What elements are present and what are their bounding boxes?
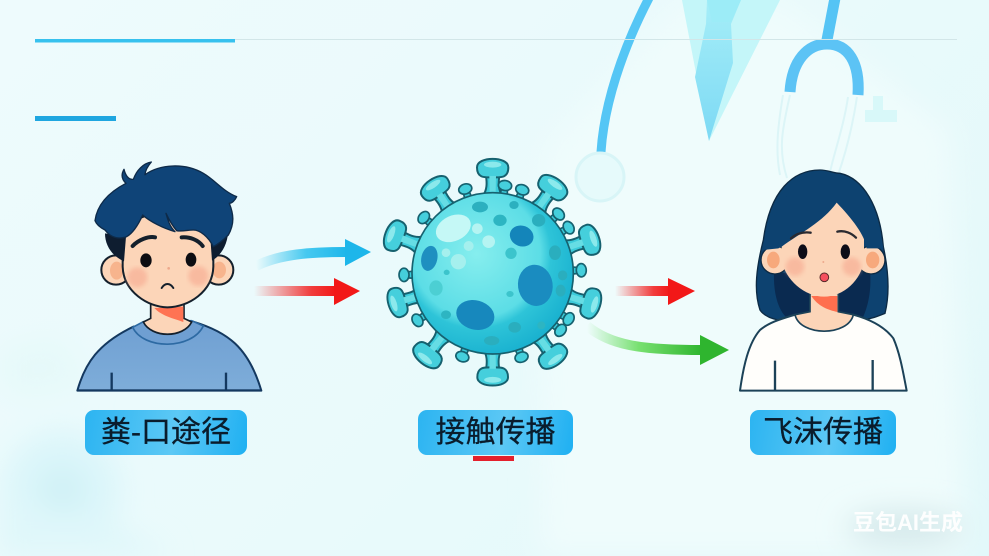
label: droplet transmission bbox=[750, 410, 896, 455]
background: faint lower-left medical shapes bbox=[0, 335, 965, 556]
short accent rule bbox=[35, 116, 116, 121]
arrow: blue, boy to virus bbox=[256, 239, 371, 266]
label: contact transmission: 接触传播 bbox=[436, 416, 556, 449]
icon: worried girl bbox=[740, 170, 907, 391]
accent underline under contact label bbox=[473, 456, 514, 461]
watermark: 豆包AI生成 bbox=[853, 510, 963, 535]
label: fecal-oral route bbox=[85, 410, 247, 455]
background: faint doctor coat bbox=[540, 0, 965, 556]
top rule bbox=[35, 39, 957, 42]
stethoscope bbox=[576, 0, 858, 201]
arrow: green, virus to girl bbox=[587, 326, 729, 365]
label: contact transmission bbox=[418, 410, 573, 455]
icon: virus bbox=[380, 159, 604, 386]
label: fecal-oral route: 粪-口途径 bbox=[101, 416, 231, 449]
label: droplet transmission: 飞沫传播 bbox=[763, 416, 883, 449]
arrow: red, boy to virus bbox=[254, 278, 360, 305]
icon: sick boy bbox=[77, 162, 261, 391]
arrow: red, virus to girl bbox=[615, 278, 695, 305]
